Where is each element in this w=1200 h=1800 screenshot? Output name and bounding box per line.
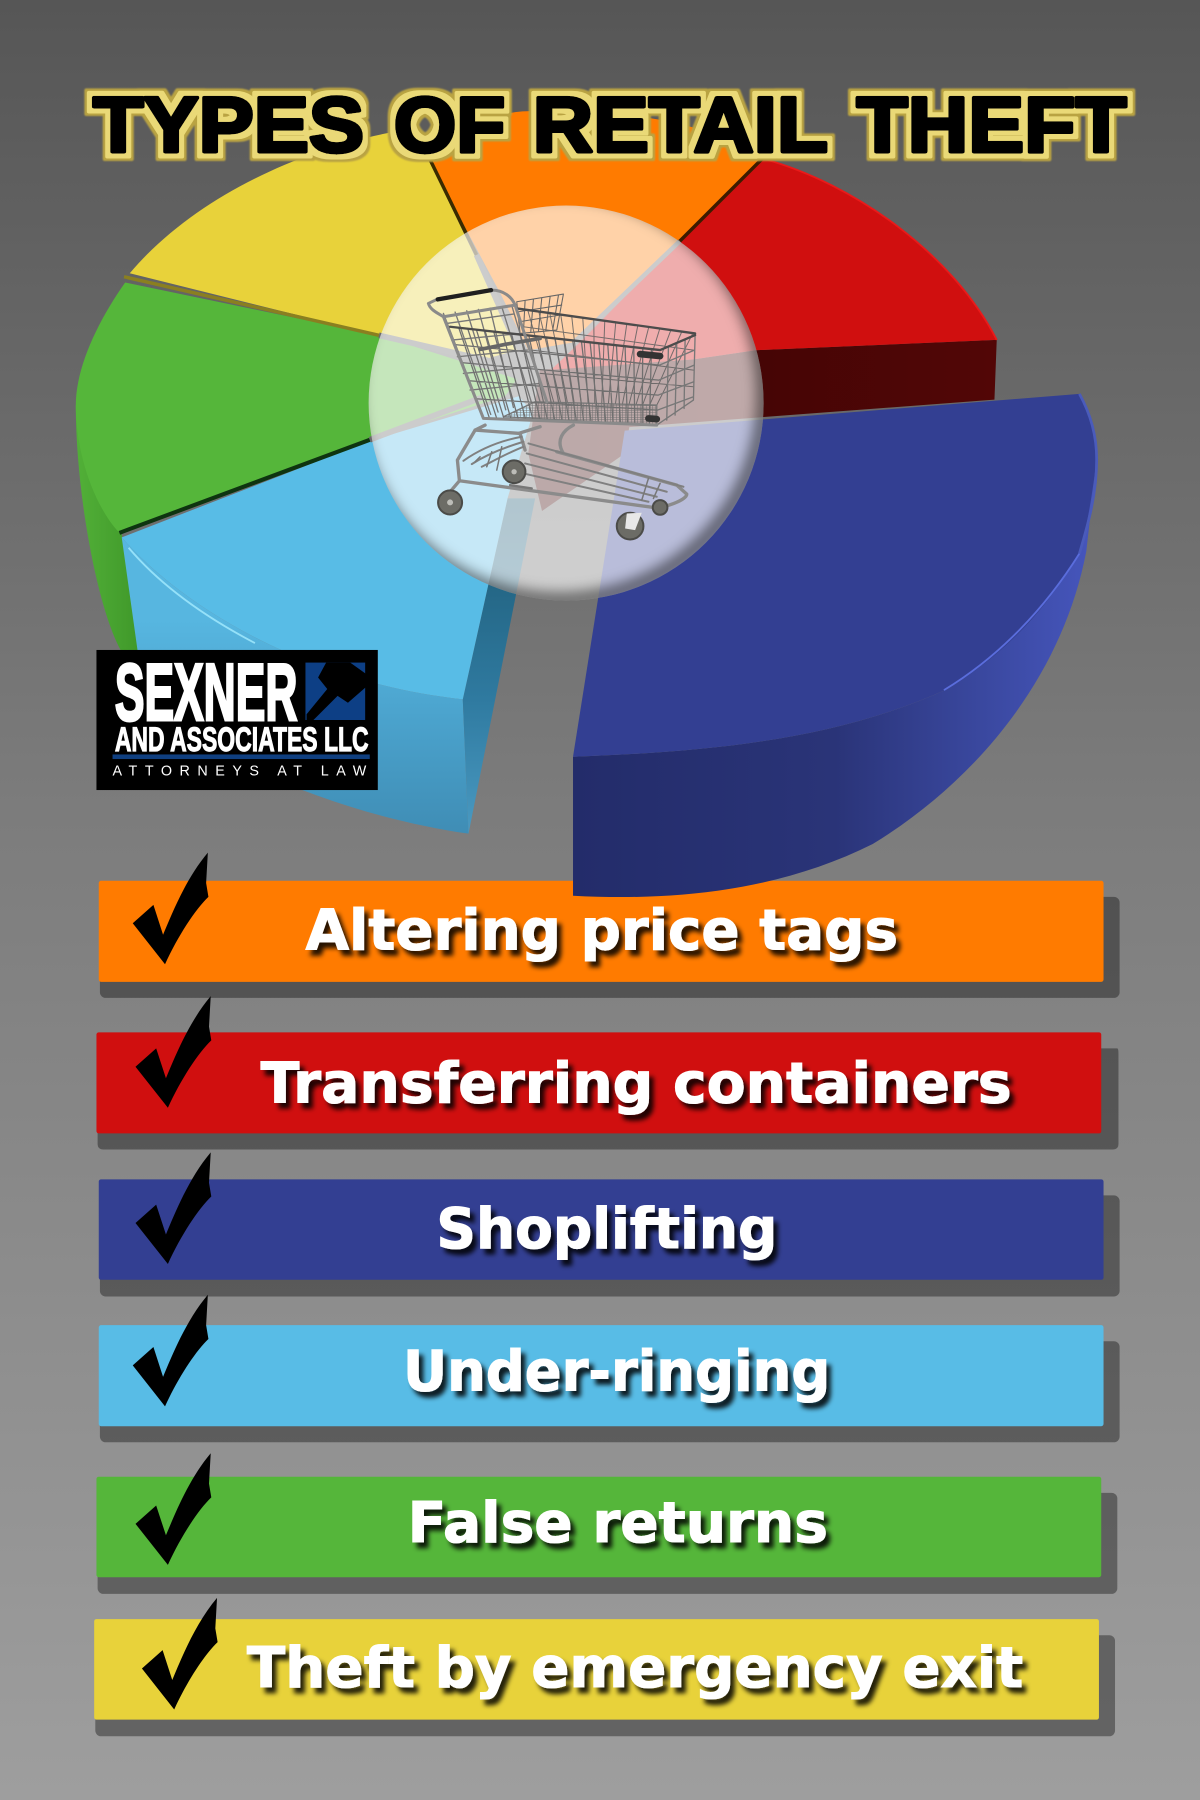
cart rim and frame: [450, 308, 695, 350]
pie slice: navy: [573, 394, 1097, 757]
label: Theft by emergency exit: [247, 1636, 1023, 1701]
slice gap: yellow orange inside: [477, 255, 512, 335]
cart child seat bar: [480, 338, 540, 349]
slice gap: green light blue inside: [370, 397, 482, 440]
bar: [98, 1493, 1117, 1594]
logo name: SEXNER: [115, 648, 297, 738]
list bar: altering price tags: [99, 881, 1120, 998]
title: RETAIL: [533, 81, 828, 169]
slice gap: orange red inside: [574, 241, 680, 342]
logo subtitle: AND ASSOCIATES LLC: [115, 721, 369, 759]
list item: transferring containers: [96, 996, 1118, 1149]
slice gap: yellow green inside: [379, 335, 488, 361]
cart front wires: [456, 328, 659, 425]
pie slice: green: [76, 282, 517, 532]
logo rule: [113, 754, 370, 759]
pie chart: [76, 111, 1097, 897]
bar: [100, 1195, 1120, 1296]
pie side: green: [76, 405, 138, 650]
icon: check mark: [133, 1295, 208, 1406]
bar face: [94, 1619, 1099, 1720]
cart wheel hubs: [447, 469, 642, 530]
cart end panel: [657, 335, 695, 425]
logo: Sexner and Associates: [96, 648, 378, 790]
slice divider: yellow orange: [428, 156, 477, 255]
bar: [95, 1635, 1115, 1736]
cart child seat flap: [517, 294, 563, 333]
pie side: light blue cut: [463, 498, 535, 834]
icon: check mark: [142, 1598, 218, 1710]
list item: false returns: [96, 1453, 1117, 1594]
list item: under-ringing: [99, 1295, 1120, 1442]
translucent center circle: [354, 189, 765, 601]
label: Transferring containers: [261, 1051, 1012, 1116]
bar: [100, 1341, 1120, 1442]
list item: altering price tags: [133, 853, 898, 964]
label: Shoplifting: [436, 1197, 777, 1262]
label: Under-ringing: [403, 1340, 830, 1405]
label: False returns: [408, 1491, 828, 1556]
navy edge: [1079, 394, 1097, 553]
cart chassis: [450, 425, 687, 508]
bar face: [96, 1477, 1101, 1577]
slice edge highlight: [762, 158, 997, 340]
cart basket bottom mesh: [503, 402, 657, 425]
cart far side wires: [517, 308, 693, 405]
label: Altering price tags: [305, 899, 898, 964]
icon: check mark: [136, 1453, 211, 1565]
icon: check mark: [133, 853, 208, 964]
pie side: light blue front: [122, 537, 469, 834]
logo gavel icon: [305, 663, 366, 721]
title: THEFT: [857, 81, 1127, 169]
cart wheels: [438, 460, 667, 539]
bar face: [96, 1032, 1101, 1133]
slice divider: orange red: [680, 156, 765, 241]
pie side: red: [528, 340, 997, 511]
pie slice: yellow: [130, 129, 517, 358]
icon: check mark: [136, 996, 211, 1108]
title: TYPES: [93, 81, 364, 169]
icon: shopping cart: [428, 290, 695, 539]
title: [93, 81, 1127, 169]
bar: [98, 1048, 1118, 1149]
bar face: [99, 1179, 1104, 1280]
pie slice: orange: [428, 111, 765, 350]
list item: theft by emergency exit: [94, 1598, 1115, 1736]
pie slice: red: [551, 158, 997, 370]
icon: check mark: [136, 1152, 211, 1264]
title: OF: [394, 81, 505, 169]
pie side: navy front: [573, 459, 1097, 897]
bar face: [99, 1325, 1104, 1426]
slice divider: green light blue: [119, 440, 370, 533]
list item: shoplifting: [99, 1152, 1120, 1296]
logo tagline: ATTORNEYS AT LAW: [113, 764, 367, 780]
light blue highlight: [129, 548, 255, 643]
navy highlight: [944, 553, 1079, 690]
cart back panel: [443, 305, 540, 417]
slice divider: yellow green: [124, 277, 379, 335]
pie slice: light blue: [122, 396, 533, 699]
